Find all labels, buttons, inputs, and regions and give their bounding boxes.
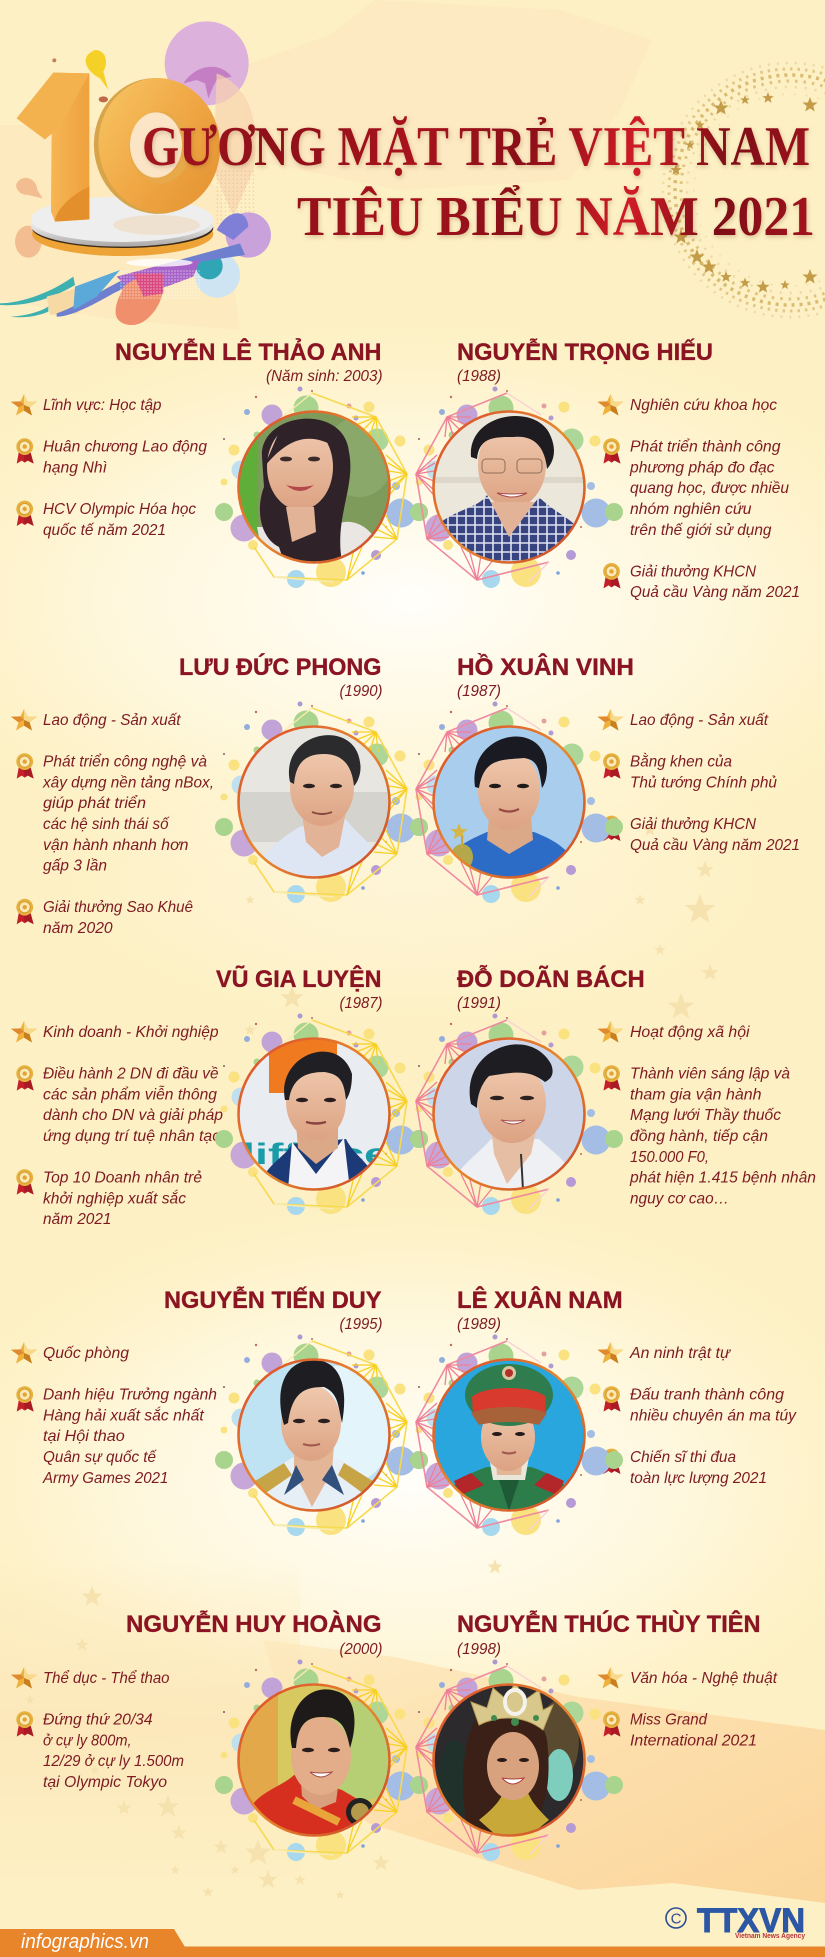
achievement: Thành viên sáng lập và bbox=[630, 1066, 790, 1083]
achievement: Điều hành 2 DN đi đầu về bbox=[43, 1066, 219, 1083]
panel: Đỗ Doãn Bách bbox=[410, 964, 816, 1215]
achievement: các hệ sinh thái số bbox=[43, 816, 170, 833]
row 2 bbox=[11, 653, 800, 937]
birth year: (2000) bbox=[340, 1641, 382, 1658]
achievement: tại Olympic Tokyo bbox=[43, 1774, 167, 1791]
icon: star bbox=[598, 1342, 624, 1364]
achievement: Phát triển công nghệ và bbox=[43, 753, 207, 771]
portrait bbox=[215, 386, 428, 588]
achievement: ứng dụng trí tuệ nhân tạo bbox=[43, 1128, 221, 1145]
achievement: tại Hội thao bbox=[43, 1428, 125, 1445]
icon: star bbox=[11, 1342, 37, 1364]
icon: star bbox=[598, 1021, 624, 1042]
achievement: Quân sự quốc tế bbox=[43, 1449, 157, 1466]
icon: star bbox=[598, 709, 624, 730]
icon: medal bbox=[16, 1386, 34, 1412]
achievement: khởi nghiệp xuất sắc bbox=[43, 1188, 186, 1207]
achievement: Bằng khen của bbox=[630, 752, 732, 771]
icon: medal bbox=[16, 1711, 34, 1737]
achievement bbox=[630, 752, 777, 791]
name: NGUYỄN HUY HOÀNG bbox=[126, 1609, 382, 1638]
achievement: Huân chương Lao động bbox=[43, 439, 207, 456]
row 5 bbox=[11, 1609, 778, 1861]
icon: medal bbox=[16, 899, 34, 924]
icon: star bbox=[11, 1667, 37, 1688]
logo: TTXVN: TTXVN bbox=[697, 1902, 805, 1940]
icon: medal bbox=[603, 438, 620, 464]
field: Kinh doanh - Khởi nghiệp bbox=[43, 1024, 219, 1041]
achievement bbox=[43, 1170, 202, 1228]
field: Nghiên cứu khoa học bbox=[630, 397, 777, 414]
icon: medal bbox=[16, 753, 34, 779]
achievement: đồng hành, tiếp cận bbox=[630, 1128, 768, 1145]
birth year: (1998) bbox=[457, 1641, 501, 1658]
name: NGUYỄN THÚC THÙY TIÊN bbox=[457, 1609, 760, 1638]
achievement: Giải thưởng KHCN bbox=[630, 816, 756, 833]
field: Lao động - Sản xuất bbox=[43, 712, 181, 729]
panel: Vũ Gia Luyện bbox=[11, 965, 428, 1228]
achievement: giúp phát triển bbox=[43, 794, 146, 812]
achievement: gấp 3 lần bbox=[43, 858, 107, 875]
row 1 bbox=[11, 337, 800, 601]
icon: star bbox=[598, 1667, 624, 1688]
platform bbox=[31, 197, 213, 267]
field: An ninh trật tự bbox=[629, 1345, 732, 1362]
icon: medal bbox=[603, 816, 620, 841]
achievement: trên thế giới sử dụng bbox=[630, 522, 772, 539]
achievement: năm 2021 bbox=[43, 1211, 112, 1228]
panel: Hồ Xuân Vinh bbox=[410, 653, 800, 903]
achievement bbox=[629, 438, 789, 539]
achievement: nguy cơ cao… bbox=[630, 1190, 729, 1207]
number 0 bbox=[85, 70, 229, 222]
source label: infographics.vn bbox=[21, 1931, 149, 1953]
achievement: quốc tế năm 2021 bbox=[43, 522, 166, 539]
achievement: Quả cầu Vàng năm 2021 bbox=[630, 837, 800, 854]
achievement: năm 2020 bbox=[43, 920, 113, 937]
achievement: Phát triển thành công bbox=[630, 438, 781, 456]
achievement: Mạng lưới Thầy thuốc bbox=[630, 1107, 781, 1124]
name: VŨ GIA LUYỆN bbox=[216, 965, 382, 993]
achievement bbox=[43, 439, 207, 476]
achievement: Miss Grand bbox=[630, 1712, 708, 1729]
birth year: (1995) bbox=[340, 1316, 382, 1333]
achievement: Danh hiệu Trưởng ngành bbox=[43, 1387, 217, 1404]
achievement: Thủ tướng Chính phủ bbox=[630, 774, 777, 791]
portrait bbox=[410, 1014, 623, 1215]
achievement bbox=[630, 563, 800, 601]
field: Quốc phòng bbox=[43, 1345, 129, 1362]
logo: TTXVN: C bbox=[671, 1910, 682, 1928]
name: NGUYỄN TIẾN DUY bbox=[164, 1285, 382, 1314]
birth year: (1987) bbox=[457, 683, 501, 700]
achievement: ở cự ly 800m, bbox=[43, 1732, 132, 1749]
achievement: các sản phẩm viễn thông bbox=[43, 1084, 217, 1103]
achievement: dành cho DN và giải pháp bbox=[43, 1107, 223, 1124]
achievement: nhiều chuyên án ma túy bbox=[630, 1407, 797, 1424]
portrait: liffe ce bbox=[242, 1138, 390, 1171]
icon: medal bbox=[603, 1449, 620, 1474]
achievement bbox=[42, 1387, 217, 1487]
title bbox=[142, 115, 815, 248]
achievement bbox=[629, 1066, 816, 1207]
icon: medal bbox=[16, 438, 34, 464]
icon: medal bbox=[603, 1386, 620, 1412]
row 3 bbox=[11, 964, 816, 1228]
icon: star bbox=[11, 394, 37, 416]
achievement: Quả cầu Vàng năm 2021 bbox=[630, 584, 800, 601]
splash shapes bbox=[0, 21, 271, 325]
portrait bbox=[215, 702, 428, 903]
achievement bbox=[42, 753, 214, 875]
portrait bbox=[215, 1334, 428, 1536]
icon: star bbox=[11, 709, 37, 730]
panel: Nguyễn Huy Hoàng bbox=[11, 1609, 428, 1861]
name: LÊ XUÂN NAM bbox=[457, 1286, 623, 1314]
field: Lĩnh vực: Học tập bbox=[43, 397, 162, 414]
panel: Nguyễn Thúc Thùy Tiên bbox=[410, 1609, 778, 1861]
achievement: Army Games 2021 bbox=[42, 1470, 168, 1487]
achievement bbox=[630, 1387, 797, 1424]
achievement bbox=[43, 501, 196, 539]
name: LƯU ĐỨC PHONG bbox=[179, 653, 382, 681]
birth year: (1989) bbox=[457, 1316, 501, 1333]
logo: TTXVN: Vietnam News Agency bbox=[735, 1933, 805, 1940]
achievement bbox=[630, 816, 800, 854]
portrait bbox=[215, 1014, 428, 1215]
achievement: Đấu tranh thành công bbox=[630, 1387, 784, 1404]
achievement: Đứng thứ 20/34 bbox=[43, 1712, 153, 1729]
achievement: phát hiện 1.415 bệnh nhân bbox=[629, 1170, 816, 1187]
achievement: HCV Olympic Hóa học bbox=[43, 501, 196, 518]
decorative stars bbox=[25, 823, 719, 1899]
panel: Lưu Đức Phong bbox=[11, 653, 428, 937]
header illustration: trophy number 10 with colour splash bbox=[0, 21, 271, 325]
panel: Lê Xuân Nam bbox=[410, 1286, 797, 1536]
achievement: toàn lực lượng 2021 bbox=[630, 1470, 767, 1487]
achievement: phương pháp đo đạc bbox=[629, 459, 774, 476]
achievement: 150.000 F0, bbox=[630, 1149, 709, 1166]
icon: medal bbox=[16, 1065, 34, 1091]
achievement: vận hành nhanh hơn bbox=[43, 837, 189, 854]
name: NGUYỄN LÊ THẢO ANH bbox=[115, 337, 382, 366]
achievement: Giải thưởng KHCN bbox=[630, 563, 756, 580]
footer bar bbox=[0, 1929, 825, 1957]
gold star ring bbox=[662, 63, 825, 317]
achievement bbox=[43, 1066, 223, 1145]
achievement: International 2021 bbox=[630, 1732, 757, 1749]
icon: medal bbox=[16, 501, 34, 526]
achievement: hạng Nhì bbox=[43, 459, 107, 476]
achievement: Giải thưởng Sao Khuê bbox=[43, 899, 193, 916]
birth year: (1991) bbox=[457, 995, 501, 1012]
birth year: (1987) bbox=[340, 995, 382, 1012]
icon: medal bbox=[603, 1711, 620, 1737]
achievement bbox=[630, 1712, 757, 1749]
field: Lao động - Sản xuất bbox=[630, 712, 769, 729]
portrait bbox=[410, 702, 623, 903]
icon: medal bbox=[603, 753, 620, 779]
achievement bbox=[43, 899, 193, 937]
field: Hoạt động xã hội bbox=[630, 1024, 750, 1041]
icon: medal bbox=[16, 1169, 34, 1195]
icon: medal bbox=[603, 1065, 620, 1091]
portrait bbox=[410, 386, 623, 588]
number 1 bbox=[17, 73, 89, 222]
birth year: (Năm sinh: 2003) bbox=[266, 368, 382, 385]
achievement: tham gia vận hành bbox=[630, 1086, 762, 1103]
panel: Nguyễn Tiến Duy bbox=[11, 1285, 428, 1536]
icon: medal bbox=[603, 563, 620, 588]
achievement: nhóm nghiên cứu bbox=[630, 501, 752, 518]
achievement: quang học, được nhiều bbox=[630, 480, 789, 497]
birth year: (1990) bbox=[340, 683, 382, 700]
icon: star bbox=[11, 1021, 37, 1042]
achievement bbox=[43, 1712, 184, 1791]
name: NGUYỄN TRỌNG HIẾU bbox=[457, 337, 713, 366]
birth year: (1988) bbox=[457, 368, 501, 385]
achievement: xây dựng nền tảng nBox, bbox=[42, 774, 214, 791]
icon: star bbox=[598, 394, 624, 416]
field: Thể dục - Thể thao bbox=[43, 1669, 170, 1687]
row 4 bbox=[11, 1285, 797, 1536]
panel: Nguyễn Trọng Hiếu bbox=[410, 337, 800, 601]
achievement bbox=[630, 1449, 767, 1487]
portrait bbox=[410, 1660, 623, 1861]
achievement: Hàng hải xuất sắc nhất bbox=[43, 1405, 204, 1424]
name: HỒ XUÂN VINH bbox=[457, 653, 634, 681]
achievement: 12/29 ở cự ly 1.500m bbox=[43, 1753, 184, 1770]
portrait bbox=[215, 1660, 428, 1861]
panel: Nguyễn Lê Thảo Anh bbox=[11, 337, 428, 588]
achievement: Top 10 Doanh nhân trẻ bbox=[43, 1170, 202, 1187]
portrait bbox=[410, 1334, 623, 1536]
field: Văn hóa - Nghệ thuật bbox=[630, 1670, 778, 1687]
achievement: Chiến sĩ thi đua bbox=[630, 1449, 736, 1466]
name: ĐỖ DOÃN BÁCH bbox=[457, 964, 645, 993]
